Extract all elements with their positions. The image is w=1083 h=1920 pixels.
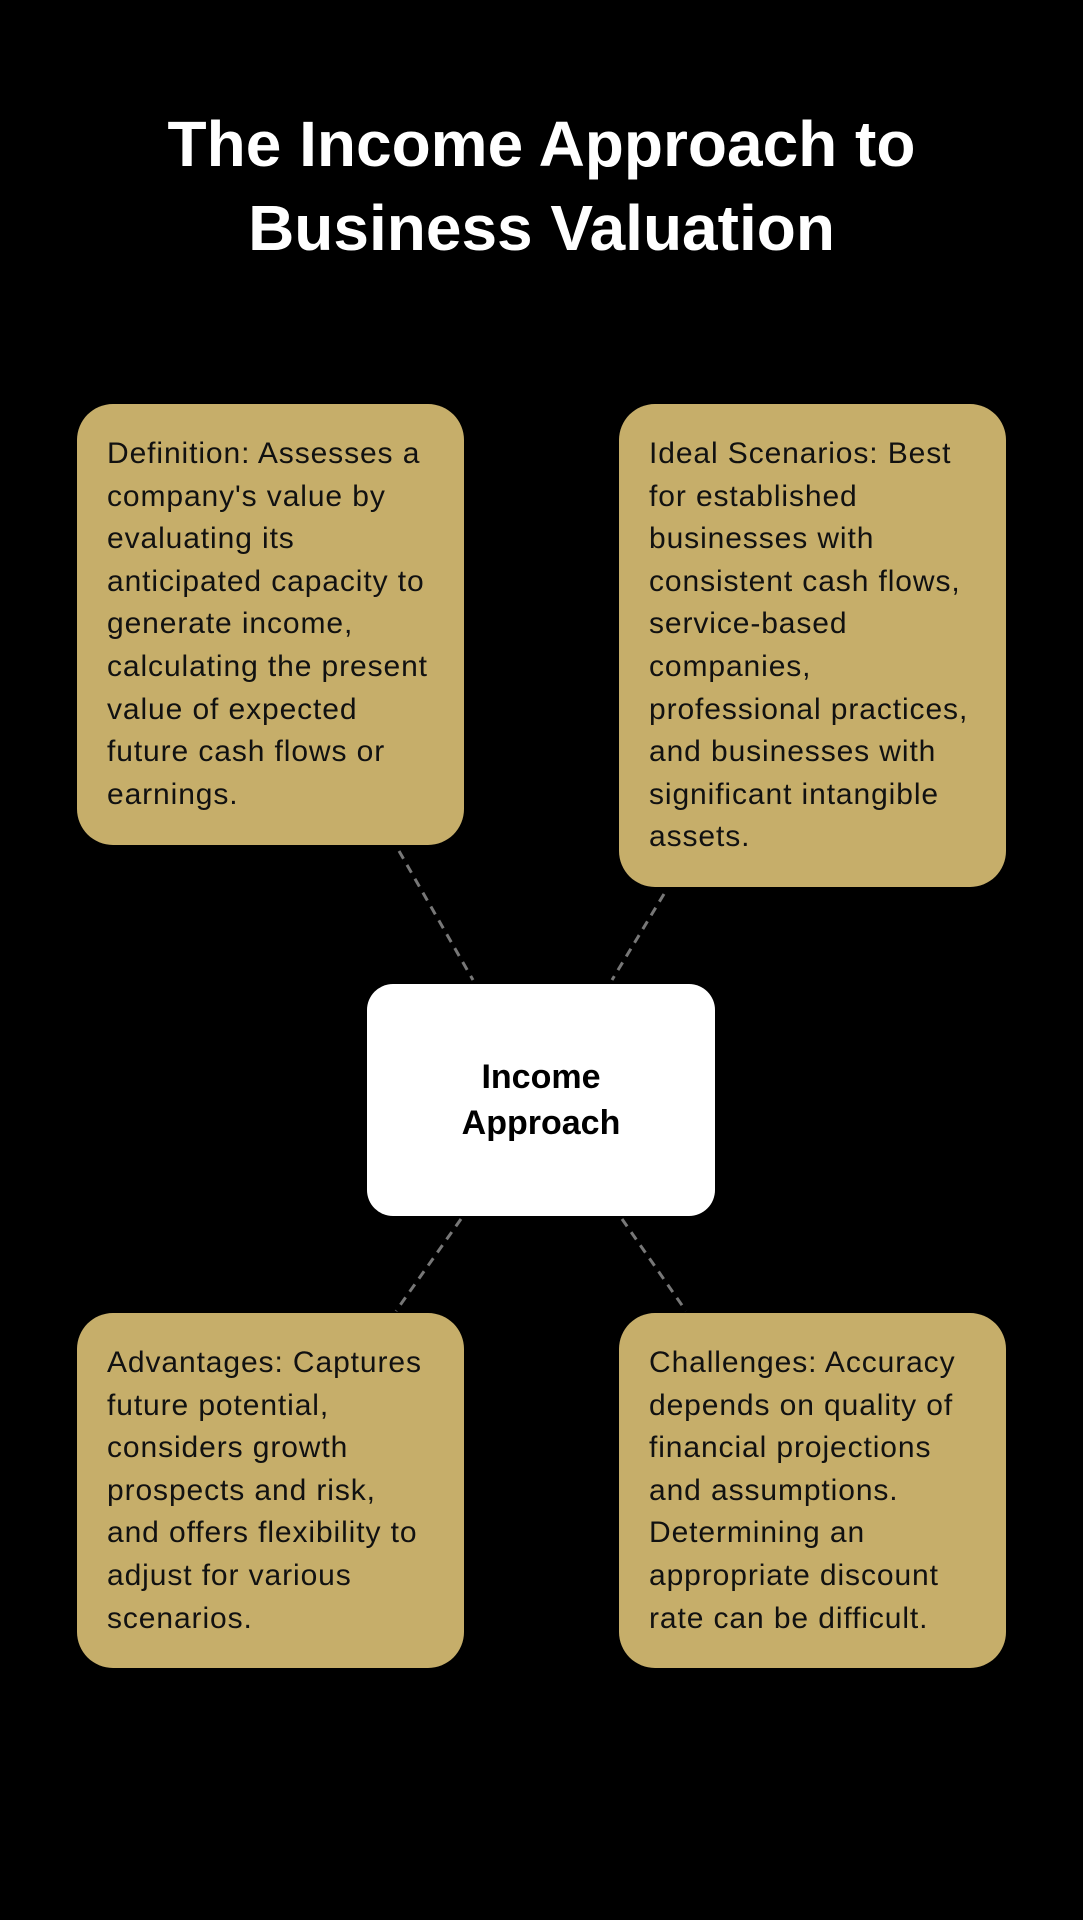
panel: advantages [77,1313,464,1668]
panel: ideal scenarios: significant intangible [649,778,939,811]
panel: ideal scenarios: companies, [649,650,811,683]
title: Business Valuation [248,192,835,264]
panel: advantages: and offers flexibility to [107,1516,417,1549]
panel: definition: generate income, [107,607,353,640]
center node [367,984,715,1216]
panel: definition: value of expected [107,693,357,726]
panel: ideal scenarios: for established [649,480,858,513]
panel: ideal scenarios: businesses with [649,522,874,555]
panel: ideal scenarios: and businesses with [649,735,936,768]
panel: challenges: depends on quality of [649,1389,953,1422]
panel: definition: calculating the present [107,650,428,683]
center node: Income [481,1058,601,1096]
panel: definition [77,404,464,845]
panel: advantages: future potential, [107,1389,329,1422]
title: The Income Approach to [168,108,915,180]
panel: challenges: Challenges: Accuracy [649,1346,956,1379]
panel: ideal scenarios: professional practices, [649,693,968,726]
panel: challenges: rate can be difficult. [649,1602,928,1635]
panel: advantages: Advantages: Captures [107,1346,422,1379]
panel: definition: evaluating its [107,522,295,555]
title [168,108,915,264]
panel: definition: Definition: Assesses a [107,437,420,470]
panel: definition: company's value by [107,480,386,513]
panel: definition: anticipated capacity to [107,565,425,598]
center node: Approach [462,1104,620,1142]
panel: advantages: prospects and risk, [107,1474,376,1507]
panel: challenges: appropriate discount [649,1559,939,1592]
panel: advantages: considers growth [107,1431,348,1464]
panel: ideal scenarios: Ideal Scenarios: Best [649,437,951,470]
panel: ideal scenarios [619,404,1006,887]
panel: challenges: Determining an [649,1516,865,1549]
panel: challenges: financial projections [649,1431,931,1464]
panel: ideal scenarios: consistent cash flows, [649,565,961,598]
panel: definition: earnings. [107,778,239,811]
panel: advantages: adjust for various [107,1559,352,1592]
panel: challenges [619,1313,1006,1668]
panel: challenges: and assumptions. [649,1474,899,1507]
panel: definition: future cash flows or [107,735,385,768]
panel: ideal scenarios: service-based [649,607,847,640]
panel: ideal scenarios: assets. [649,820,750,853]
panel: advantages: scenarios. [107,1602,253,1635]
